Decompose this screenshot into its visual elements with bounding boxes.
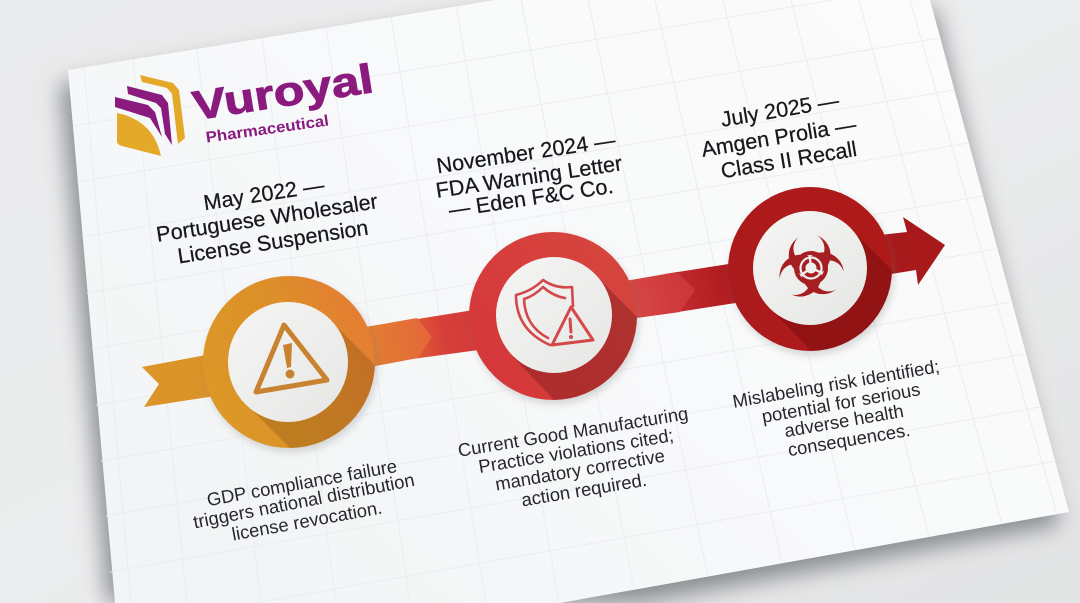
heading: Amgen Prolia —: [700, 112, 859, 162]
logo subtitle: Pharmaceutical: [205, 112, 330, 147]
heading: July 2025 —: [719, 88, 841, 132]
heading: [700, 88, 859, 183]
description: action required.: [520, 469, 648, 510]
milestone 2: November 2024: [434, 128, 695, 510]
icon: warning triangle: [256, 325, 327, 392]
description: triggers national distribution: [191, 469, 416, 532]
ribbon segment 2: [665, 263, 742, 314]
logo wordmark: Vuroyal: [189, 55, 376, 129]
description: potential for serious: [760, 378, 922, 427]
description: license revocation.: [230, 497, 384, 545]
logo mark: [115, 75, 185, 156]
logo: [115, 55, 376, 156]
description: Current Good Manufacturing: [456, 402, 690, 461]
milestone 1: May 2022: [155, 173, 430, 545]
orange node: [203, 276, 380, 455]
icon: biohazard: [780, 235, 844, 297]
description: [731, 355, 941, 460]
heading: May 2022 —: [202, 173, 326, 215]
description: mandatory corrective: [493, 445, 666, 495]
icon: shield with warning: [516, 280, 593, 345]
heading: Portuguese Wholesaler: [155, 189, 379, 247]
heading: FDA Warning Letter: [434, 151, 624, 203]
heading: — Eden F&C Co.: [447, 174, 615, 222]
description: Mislabeling risk identified;: [731, 355, 941, 412]
arrow head: [880, 217, 945, 285]
description: consequences.: [786, 419, 912, 460]
dark red node: [728, 187, 897, 358]
heading: License Suspension: [176, 216, 370, 268]
description: Practice violations cited;: [477, 424, 675, 477]
heading: Class II Recall: [719, 137, 859, 183]
ribbon segment 1: [405, 309, 486, 360]
timeline ribbon arrow: [142, 217, 945, 407]
description: [456, 402, 690, 510]
description: GDP compliance failure: [205, 455, 399, 510]
red node: [468, 232, 642, 407]
ribbon tail: [142, 355, 215, 407]
milestone 3: July 2025: [700, 88, 950, 460]
heading: [155, 173, 379, 268]
heading: [434, 128, 624, 222]
description: adverse health: [783, 400, 905, 441]
heading: November 2024 —: [435, 128, 617, 178]
